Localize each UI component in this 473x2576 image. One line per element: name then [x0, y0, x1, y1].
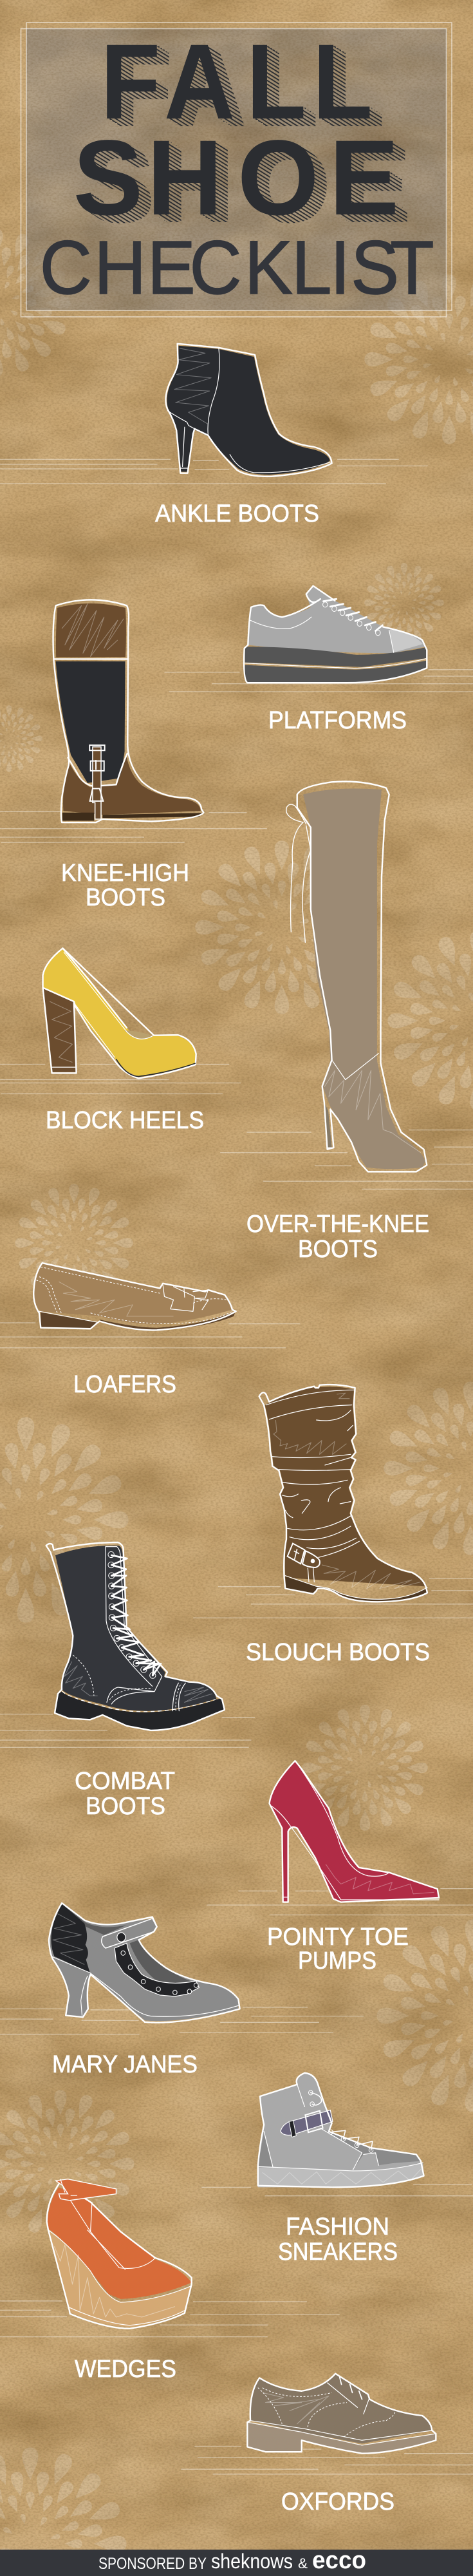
shoe: platforms [244, 586, 427, 683]
title panel [26, 28, 447, 310]
footer: sponsor bar: ecco [312, 2547, 366, 2574]
shoe: loafers [33, 1263, 236, 1330]
footer: sponsor bar: SPONSORED BY [98, 2555, 207, 2573]
shoe: wedges [47, 2179, 192, 2329]
label: fashion sneakers: SNEAKERS [278, 2239, 398, 2266]
footer: sponsor bar [0, 2547, 473, 2576]
shoe: knee-high boots [53, 600, 203, 822]
label: fashion sneakers [278, 2213, 398, 2266]
label: mary janes: MARY JANES [52, 2051, 198, 2078]
label: block heels: BLOCK HEELS [46, 1107, 204, 1134]
label: loafers: LOAFERS [73, 1371, 176, 1398]
label: slouch boots: SLOUCH BOOTS [246, 1639, 430, 1666]
shoe: block heels [43, 948, 196, 1078]
label: pointy toe pumps: POINTY TOE [267, 1924, 409, 1951]
label: fashion sneakers: FASHION [286, 2213, 389, 2240]
title: Fall Shoe Checklist: FALL [100, 22, 373, 141]
label: knee-high boots: BOOTS [86, 884, 165, 911]
title: Fall Shoe Checklist [42, 45, 433, 295]
shoe: oxfords [247, 2374, 436, 2454]
title frame [21, 23, 452, 317]
shoe: combat boots [46, 1542, 225, 1730]
label: ankle boots: ANKLE BOOTS [155, 500, 319, 527]
shoe: pointy toe pumps [270, 1761, 439, 1902]
label: knee-high boots [61, 860, 189, 911]
footer: sponsor bar: & [298, 2555, 308, 2571]
label: knee-high boots: KNEE-HIGH [61, 860, 189, 887]
label: combat boots [75, 1768, 175, 1820]
label: over-the-knee boots: BOOTS [298, 1236, 378, 1263]
shoe: over-the-knee boots [286, 782, 427, 1171]
label: over-the-knee boots [246, 1211, 429, 1263]
shoe: mary janes [49, 1903, 240, 2023]
shoe: slouch boots [259, 1385, 427, 1602]
title: Fall Shoe Checklist: CHECKLIST [40, 225, 434, 310]
label: over-the-knee boots: OVER-THE-KNEE [246, 1211, 429, 1238]
title: Fall Shoe Checklist: SHOE [73, 118, 399, 237]
label: oxfords: OXFORDS [281, 2488, 394, 2515]
shoe: fashion sneakers [258, 2073, 424, 2187]
label: wedges: WEDGES [75, 2356, 176, 2383]
label: combat boots: COMBAT [75, 1768, 175, 1795]
footer: sponsor bar: sheknows [211, 2550, 293, 2573]
label: pointy toe pumps [267, 1924, 409, 1975]
label: pointy toe pumps: PUMPS [298, 1947, 376, 1975]
label: platforms: PLATFORMS [268, 707, 407, 734]
label: combat boots: BOOTS [86, 1793, 165, 1820]
shoe: ankle boots [166, 344, 332, 477]
